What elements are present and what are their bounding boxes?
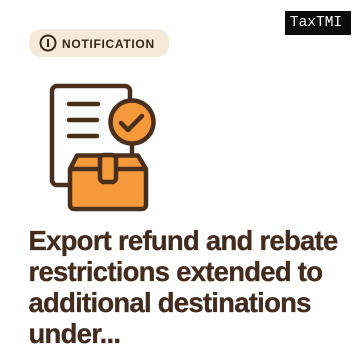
badge: notification bbox=[29, 29, 169, 57]
check circle bbox=[110, 100, 154, 144]
logo: TaxTMI bbox=[285, 11, 351, 35]
document bbox=[52, 86, 132, 185]
title: Export refund and rebate bbox=[28, 225, 338, 256]
title: additional destinations bbox=[28, 287, 311, 318]
box bbox=[69, 155, 147, 209]
icon: info circle bbox=[40, 34, 56, 52]
logo: TaxTMI: TaxTMI bbox=[290, 15, 342, 31]
title: restrictions extended to bbox=[28, 256, 322, 287]
title: under... bbox=[28, 318, 120, 349]
badge label: NOTIFICATION bbox=[62, 37, 155, 51]
icon: document with check and box bbox=[50, 84, 156, 212]
